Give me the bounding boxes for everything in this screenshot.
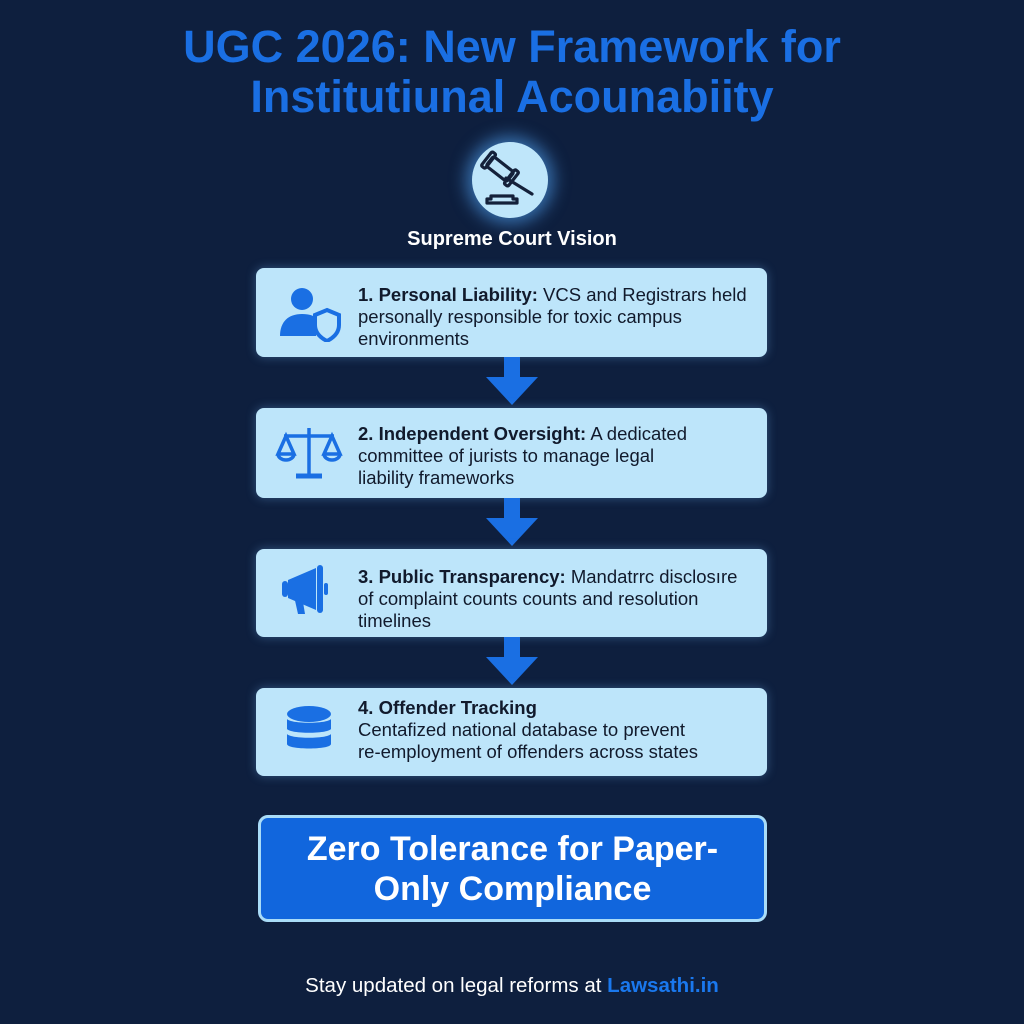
card 2: 2. Independent Oversight: A dedicated	[358, 423, 687, 444]
card 4: re-employment of offenders across states	[358, 741, 698, 762]
callout: zero tolerance: Only Compliance	[374, 870, 651, 908]
icon: scales	[275, 428, 343, 478]
callout: zero tolerance: Zero Tolerance for Paper-	[307, 830, 718, 868]
icon: megaphone	[282, 565, 328, 614]
card 1	[256, 268, 767, 357]
title	[183, 21, 841, 122]
subheading: Supreme Court Vision	[407, 228, 617, 250]
card 3: of complaint counts counts and resolution	[358, 588, 698, 609]
icon: database	[287, 706, 331, 748]
card 1: 1. Personal Liability: VCS and Registrars held	[358, 284, 747, 305]
card 1: personally responsible for toxic campus	[358, 306, 682, 327]
card 3: 3. Public Transparency: Mandatrrc disclosıre	[358, 566, 737, 587]
icon: gavel	[472, 142, 548, 218]
arrow 3	[486, 637, 538, 685]
icon: person shield	[280, 288, 341, 342]
card 2	[256, 408, 767, 498]
title: UGC 2026: New Framework for	[183, 21, 841, 72]
card 1: environments	[358, 328, 469, 349]
arrow 1	[486, 357, 538, 405]
arrow 2	[486, 498, 538, 546]
card 4	[256, 688, 767, 776]
card 4: Centafized national database to prevent	[358, 719, 685, 740]
footer: Stay updated on legal reforms at Lawsathi.in	[305, 974, 719, 997]
card 3: timelines	[358, 610, 431, 631]
card 2: liability frameworks	[358, 467, 514, 488]
card 3	[256, 549, 767, 637]
title: Institutiunal Acounabiity	[250, 71, 774, 122]
card 2: committee of jurists to manage legal	[358, 445, 654, 466]
callout: zero tolerance	[258, 815, 767, 922]
card 4: 4. Offender Tracking	[358, 697, 537, 718]
